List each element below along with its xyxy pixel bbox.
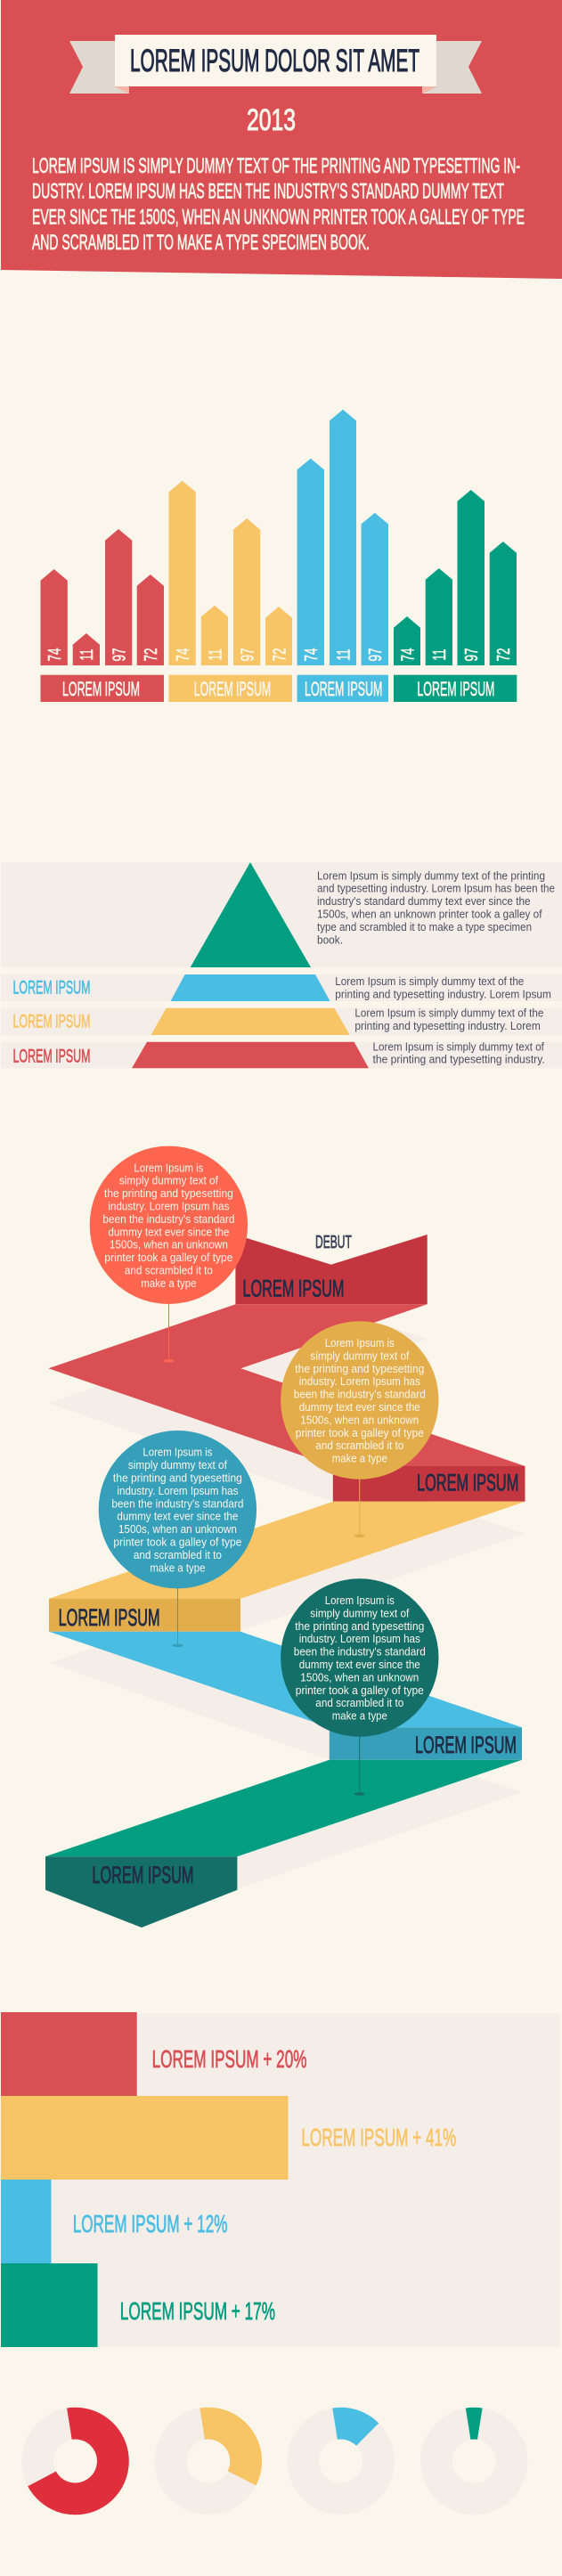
pyramid blue tier xyxy=(171,974,330,1001)
callout: gold bubble: 1500s, when an unknown xyxy=(300,1414,419,1426)
bar: 12 percent: LOREM IPSUM + 12% xyxy=(73,2210,228,2238)
donut: green xyxy=(420,2408,527,2515)
callout: gold bubble: make a type xyxy=(332,1453,387,1465)
callout: teal bubble: Lorem Ipsum is xyxy=(143,1447,212,1459)
bar values xyxy=(45,648,514,661)
dark red band xyxy=(333,1466,525,1502)
callout: coral bubble: simply dummy text of xyxy=(119,1175,218,1187)
chart: arrow bars xyxy=(41,410,517,702)
bar group labels: LOREM IPSUM xyxy=(305,678,382,700)
callout: gold bubble: industry. Lorem Ipsum has xyxy=(299,1375,420,1388)
callout: teal bubble xyxy=(99,1431,257,1647)
ribbon left tail xyxy=(69,41,129,94)
dark yellow band xyxy=(49,1599,240,1632)
chart: zigzag timeline xyxy=(45,1146,525,1928)
bar group labels: LOREM IPSUM xyxy=(62,678,140,700)
callout: coral bubble: industry. Lorem Ipsum has xyxy=(108,1201,229,1213)
callout: green bubble: Lorem Ipsum is xyxy=(325,1594,395,1607)
callout: green bubble: printer took a galley of type xyxy=(296,1684,424,1697)
callout: coral bubble: printer took a galley of type xyxy=(104,1251,232,1264)
red arrow bars xyxy=(41,529,164,665)
bar: 20 percent xyxy=(1,2012,306,2096)
bar values: 11 xyxy=(335,648,354,661)
callout: green bubble: been the industry's standard xyxy=(294,1646,426,1659)
yellow tier text xyxy=(354,1007,543,1032)
bar values: 97 xyxy=(239,648,258,661)
bar values: 72 xyxy=(271,648,290,661)
bar values: 97 xyxy=(366,648,386,661)
bar: 17 percent xyxy=(1,2263,275,2347)
yellow tier text: Lorem Ipsum is simply dummy text of the xyxy=(354,1007,543,1020)
bar values: 11 xyxy=(206,648,225,661)
callout: coral bubble: the printing and typesetting xyxy=(104,1187,233,1200)
callout: green bubble: and scrambled it to xyxy=(315,1697,403,1709)
top tier text: industry's standard dummy text ever since the xyxy=(317,895,531,908)
green arm xyxy=(45,1760,522,1856)
year: 2013 xyxy=(247,103,296,137)
blue arrow bars xyxy=(297,410,388,665)
callout: teal bubble: dummy text ever since the xyxy=(117,1511,238,1523)
tier labels: LOREM IPSUM xyxy=(12,978,91,999)
bar: 20 percent: LOREM IPSUM + 20% xyxy=(152,2045,306,2073)
bar values: 72 xyxy=(142,648,161,661)
yellow arrow bars xyxy=(169,481,292,665)
band labels: LOREM IPSUM xyxy=(242,1276,344,1302)
callout: green bubble xyxy=(281,1578,438,1796)
callout: gold bubble: been the industry's standard xyxy=(294,1389,426,1401)
bar: 12 percent xyxy=(1,2180,228,2263)
dark blue band xyxy=(330,1727,522,1760)
callout: teal bubble: simply dummy text of xyxy=(128,1459,227,1471)
pyramid top tier xyxy=(191,862,311,967)
bar group labels xyxy=(41,675,517,702)
bar values: 72 xyxy=(494,648,514,661)
callout: teal bubble: and scrambled it to xyxy=(134,1549,222,1561)
tier labels xyxy=(12,978,91,1066)
debut label: DEBUT xyxy=(315,1233,352,1252)
dark red start band xyxy=(235,1235,428,1304)
blue tier text: Lorem Ipsum is simply dummy text of the xyxy=(335,975,524,988)
band labels xyxy=(59,1276,518,1888)
top tier text: type and scrambled it to make a type specimen xyxy=(317,921,532,933)
callout: gold bubble: simply dummy text of xyxy=(310,1349,410,1362)
red tier text: the printing and typesetting industry. xyxy=(372,1054,545,1066)
donut: red xyxy=(21,2408,129,2515)
callout: green bubble: industry. Lorem Ipsum has xyxy=(299,1633,420,1645)
title banner xyxy=(115,35,436,86)
yellow arm xyxy=(49,1502,525,1599)
callout: coral bubble: 1500s, when an unknown xyxy=(110,1239,228,1251)
red arm xyxy=(48,1304,525,1466)
ribbon right tail xyxy=(422,41,482,94)
callout: green bubble: 1500s, when an unknown xyxy=(300,1671,419,1683)
pyramid red tier xyxy=(132,1042,369,1068)
callout: gold bubble: printer took a galley of type xyxy=(296,1427,424,1439)
callout: teal bubble: 1500s, when an unknown xyxy=(118,1523,237,1536)
band labels: LOREM IPSUM xyxy=(92,1862,193,1888)
callout: gold bubble: dummy text ever since the xyxy=(299,1401,420,1414)
callout: coral bubble: Lorem Ipsum is xyxy=(134,1162,203,1174)
callout: gold bubble xyxy=(281,1321,438,1537)
donut: yellow xyxy=(155,2408,262,2515)
bar values: 11 xyxy=(430,648,450,661)
bar values: 97 xyxy=(462,648,482,661)
intro text xyxy=(32,155,525,255)
chart: pyramid xyxy=(1,862,562,1068)
chart: donuts xyxy=(21,2408,527,2515)
donut: blue xyxy=(287,2408,395,2515)
top tier text xyxy=(317,869,555,946)
zigzag shadows xyxy=(48,1322,525,1888)
top tier text: Lorem Ipsum is simply dummy text of the printing xyxy=(317,869,545,882)
yellow tier text: printing and typesetting industry. Lorem xyxy=(354,1020,541,1032)
callout: coral bubble xyxy=(90,1146,248,1362)
top tier text: book. xyxy=(317,933,343,946)
callout: green bubble: make a type xyxy=(332,1710,387,1723)
red tier text: Lorem Ipsum is simply dummy text of xyxy=(372,1040,544,1053)
bar: 17 percent: LOREM IPSUM + 17% xyxy=(120,2297,275,2325)
bar group labels: LOREM IPSUM xyxy=(194,678,271,700)
bar values: 74 xyxy=(302,648,322,661)
callout: gold bubble: and scrambled it to xyxy=(315,1439,403,1452)
bar values: 97 xyxy=(110,648,130,661)
callout: teal bubble: make a type xyxy=(150,1561,205,1574)
panel: header xyxy=(1,0,562,279)
callout: coral bubble: make a type xyxy=(141,1277,196,1290)
bar group labels: LOREM IPSUM xyxy=(417,678,494,700)
bar values: 11 xyxy=(77,648,97,661)
bar values: 74 xyxy=(45,648,65,661)
callout: teal bubble: the printing and typesetting xyxy=(113,1471,242,1484)
pyramid yellow tier xyxy=(151,1008,350,1035)
band labels: LOREM IPSUM xyxy=(59,1604,160,1631)
tier labels: LOREM IPSUM xyxy=(12,1046,91,1066)
callout: coral bubble: dummy text ever since the xyxy=(108,1226,229,1238)
callout: gold bubble: Lorem Ipsum is xyxy=(325,1337,395,1349)
bar values: 74 xyxy=(399,648,419,661)
green arrow bars xyxy=(394,490,517,665)
callout: green bubble: dummy text ever since the xyxy=(299,1659,420,1671)
chart: horizontal percentage bars xyxy=(1,2012,560,2347)
callout: teal bubble: industry. Lorem Ipsum has xyxy=(117,1485,238,1497)
callout: coral bubble: been the industry's standard xyxy=(102,1213,234,1226)
callout: gold bubble: the printing and typesetting xyxy=(295,1363,424,1375)
tier labels: LOREM IPSUM xyxy=(12,1012,91,1032)
top tier text: 1500s, when an unknown printer took a galley of xyxy=(317,909,542,921)
bar: 41 percent: LOREM IPSUM + 41% xyxy=(301,2124,456,2151)
callout: teal bubble: printer took a galley of type xyxy=(113,1536,241,1548)
blue tier text xyxy=(335,975,551,1001)
bar values: 74 xyxy=(174,648,193,661)
dark green end band xyxy=(45,1856,237,1928)
callout: coral bubble: and scrambled it to xyxy=(125,1265,213,1277)
red tier text xyxy=(372,1040,545,1066)
blue tier text: printing and typesetting industry. Lorem Ipsum xyxy=(335,989,551,1001)
blue arm xyxy=(49,1632,522,1727)
callout: green bubble: the printing and typesetting xyxy=(295,1620,424,1633)
callout: teal bubble: been the industry's standard xyxy=(111,1497,243,1510)
bar: 41 percent xyxy=(1,2096,456,2180)
callout: green bubble: simply dummy text of xyxy=(310,1607,410,1619)
